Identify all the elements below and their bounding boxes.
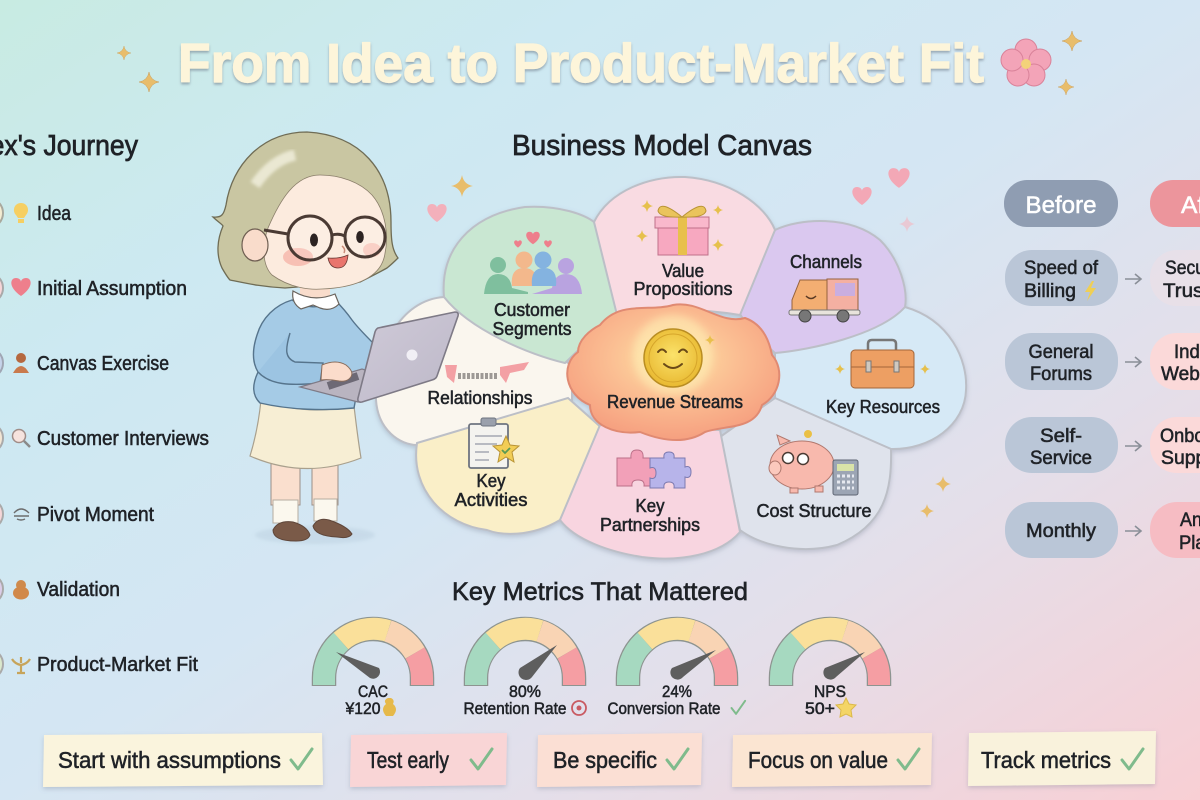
milestone: Pivot Moment [0,499,154,529]
heading: Business Model Canvas: Business Model Canvas [512,130,812,162]
gauge: CAC: ¥120 [345,699,380,718]
segment: key partnerships [600,450,700,535]
gauge: Retention Rate: 80% [509,682,541,701]
heading: Key Metrics That Mattered: Key Metrics That Mattered [452,578,748,606]
petal: value propositions [594,177,775,315]
segment: relationships: Relationships [428,388,532,408]
row: forums: General [1028,342,1094,363]
segment: cost structure: Cost Structure [756,501,872,521]
milestone: Customer Interviews [0,423,209,453]
note: Be specific: Be specific [553,747,657,773]
petal: key activities [416,398,604,534]
milestone: Initial Assumption: Initial Assumption [37,278,187,300]
milestone: Validation: Validation [37,579,120,601]
title: From Idea to Product-Market Fit [178,32,984,94]
glasses [264,216,385,260]
pill: Before [1004,180,1118,227]
segment: customer segments: Segments [492,319,572,339]
skirt [250,400,361,469]
milestone: Canvas Exercise [0,348,169,378]
note: Test early: Test early [367,747,449,773]
icon: pink flower [1001,39,1051,86]
milestone: Product-Market Fit: Product-Market Fit [37,654,198,676]
laptop base [300,369,372,402]
icon: smiling coin [633,315,715,395]
milestone: Idea: Idea [37,203,72,225]
sweater [253,300,375,410]
segment: revenue streams [607,315,743,412]
ear [242,229,268,261]
icon: relationship sketch [445,362,529,383]
icon: piggy bank and calculator [769,430,858,495]
milestone: Canvas Exercise: Canvas Exercise [37,353,169,375]
socks [273,499,337,523]
row: self-service [1005,417,1200,473]
gauge: Retention Rate: Retention Rate [464,699,566,718]
gauge: NPS [781,629,879,718]
panel: before and after [1004,180,1200,558]
segment: value propositions: Propositions [634,279,732,299]
gauge: Retention Rate [464,629,586,718]
diagram: business model canvas flower [376,177,966,559]
illustration: girl [213,132,398,544]
shoes [273,519,352,541]
segment: revenue streams: Revenue Streams [607,392,743,412]
row: forums: Forums [1030,364,1092,385]
segment: value propositions: Value [662,261,704,281]
legs [271,460,338,505]
icon: people [484,232,582,294]
segment: relationships [428,362,532,408]
eyes [310,234,318,246]
segment: channels: Channels [790,252,862,272]
segment: key partnerships: Key [636,496,664,516]
petal: cost structure [720,398,891,549]
segment: cost structure [756,430,872,521]
collar [293,291,339,309]
pill: After [1150,180,1200,227]
decorative hearts and sparkles [427,168,951,518]
hair [213,132,398,288]
hand [321,362,352,381]
note: Focus on value [732,733,932,787]
takeaway strips [43,731,1156,787]
petal: key partnerships [560,425,740,559]
segment: channels [789,252,862,322]
segment: key activities [454,418,528,510]
nose and mouth [342,246,345,253]
segment: customer segments: Customer [494,300,570,320]
row: forums [1005,333,1200,390]
gauge: CAC [324,629,422,718]
segment: customer segments [484,232,582,339]
row: pricing: Monthly [1026,521,1097,542]
row: self-service: Self- [1040,426,1082,447]
petal: customer segments [444,207,620,363]
gauge: Conversion Rate: Conversion Rate [608,699,720,718]
icon: gift box [636,200,724,255]
gauge: Conversion Rate: 24% [662,682,692,701]
row: billing: Billing [1024,281,1076,302]
icon: delivery van [789,279,860,322]
segment: key resources [826,340,940,417]
pill: Before: Before [1026,192,1096,219]
petal: revenue streams cloud [567,304,779,440]
row: billing: Speed of [1024,258,1099,279]
arm [258,333,323,384]
milestone: Initial Assumption [0,273,187,303]
laptop screen [358,312,458,402]
illustration: laptop and hand [300,312,458,402]
gauge: NPS: 50+ [805,699,835,718]
title sparkles [117,31,1082,95]
icon: briefcase [835,340,930,388]
hair highlight [255,155,295,185]
milestone: Validation [0,574,120,604]
icon: clipboard with star [469,418,519,468]
icon: puzzle pieces [617,450,691,488]
note: Track metrics: Track metrics [981,747,1111,773]
gauge: NPS: NPS [814,682,846,701]
row: self-service: Service [1030,448,1092,469]
row: pricing [1005,502,1200,558]
petal: key resources [775,307,966,449]
milestone: Product-Market Fit [0,649,198,679]
milestone: Idea [0,198,72,228]
milestone: Pivot Moment: Pivot Moment [37,504,154,526]
row: billing [1005,250,1200,306]
segment: key resources: Key Resources [826,397,940,417]
cheeks [283,248,313,266]
neck [300,282,330,300]
face [264,175,387,289]
petal: relationships [376,297,572,445]
milestone: Customer Interviews: Customer Interviews [37,428,209,450]
segment: key activities: Activities [454,490,528,510]
segment: key partnerships: Partnerships [600,515,700,535]
note: Start with assumptions: Start with assumptions [58,747,281,773]
segment: key activities: Key [476,471,506,491]
petal: channels [738,221,906,353]
panel: journey timeline [0,198,209,679]
note: Be specific [537,733,702,787]
note: Start with assumptions [43,733,323,787]
note: Test early [350,733,507,787]
note: Track metrics [968,731,1156,786]
segment: value propositions [634,200,732,299]
gauge: Conversion Rate [608,629,745,718]
gauge: CAC: CAC [358,682,388,701]
note: Focus on value: Focus on value [748,747,888,773]
